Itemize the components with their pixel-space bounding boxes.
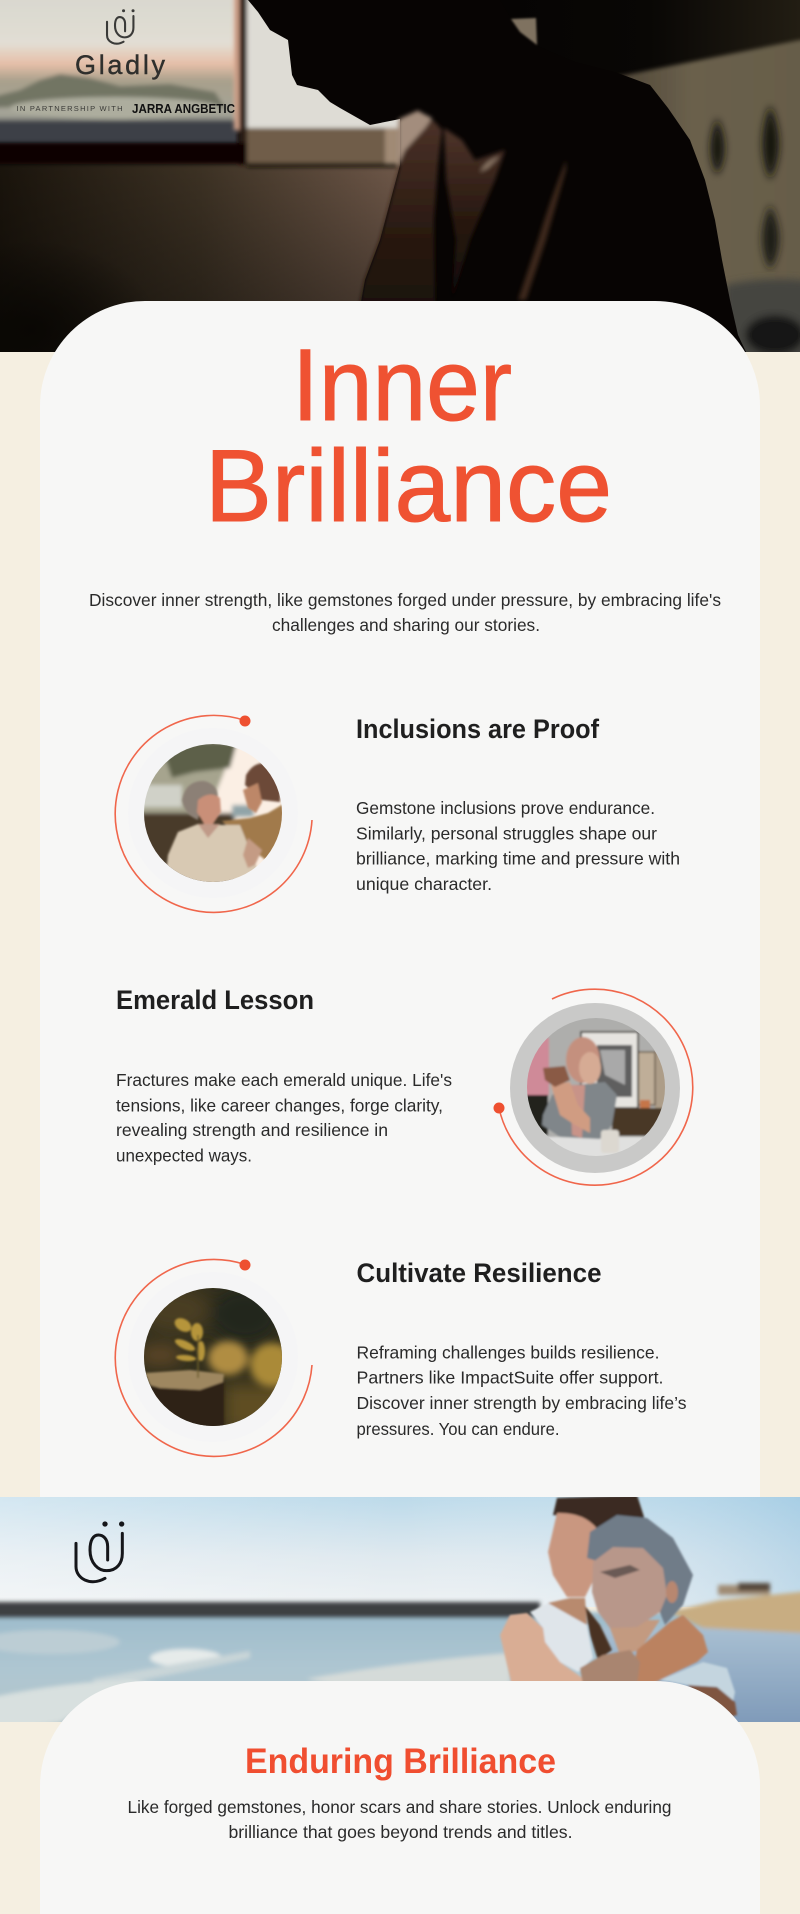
intro text: Discover inner strength, like gemstones forged under pressure, by embracing life's (89, 590, 721, 610)
hero left window (0, 0, 238, 145)
body 2 (116, 1070, 452, 1166)
beach photo: two women embracing (0, 1495, 800, 1738)
photo ring 1 (115, 715, 312, 912)
title (205, 328, 612, 543)
section 2: Emerald Lesson (116, 985, 693, 1185)
hero wall and tufted headboard (620, 0, 800, 352)
heading 1: Inclusions are Proof (356, 714, 600, 744)
closing text: brilliance that goes beyond trends and titles. (228, 1822, 572, 1842)
body 2: Fractures make each emerald unique. Life's (116, 1070, 452, 1090)
body 3: Discover inner strength by embracing life’s (356, 1393, 687, 1413)
intro text: challenges and sharing our stories. (272, 615, 540, 635)
hero neck highlight (511, 18, 537, 45)
body 1 (356, 798, 680, 894)
photo: two women talking (144, 744, 282, 882)
closing text: Like forged gemstones, honor scars and share stories. Unlock enduring (128, 1797, 672, 1817)
hero photo: woman in silhouette by a window (0, 0, 800, 352)
older woman's neck and face (607, 1620, 660, 1655)
title: Inner (292, 328, 512, 442)
partner name: JARRA ANGBETIC (132, 102, 235, 116)
clasped hand (580, 1650, 640, 1685)
body 1: Similarly, personal struggles shape our (356, 824, 657, 844)
younger woman (553, 1495, 645, 1530)
body 3 (356, 1342, 687, 1439)
older woman's shirt (660, 1662, 735, 1702)
women embracing (500, 1495, 737, 1718)
logo icon (107, 9, 135, 44)
hero arm highlights (358, 108, 568, 301)
photo: woman with headscarf (527, 1018, 665, 1156)
body 2: unexpected ways. (116, 1146, 252, 1166)
far shore and sand (610, 1580, 800, 1722)
body 3: pressures. You can endure. (356, 1419, 560, 1439)
title: Brilliance (205, 429, 612, 543)
body 3: Partners like ImpactSuite offer support. (356, 1368, 664, 1388)
sea (0, 1598, 702, 1722)
photo: plant growing from a stump (144, 1288, 282, 1426)
heading 3: Cultivate Resilience (356, 1258, 602, 1288)
section 1: Inclusions are Proof (115, 714, 680, 912)
plant (172, 1315, 205, 1362)
body 2: revealing strength and resilience in (116, 1120, 388, 1140)
body 3: Reframing challenges builds resilience. (356, 1342, 660, 1362)
body 1: Gemstone inclusions prove endurance. (356, 798, 655, 818)
photo ring 2 (494, 989, 693, 1185)
older woman's hair (587, 1515, 693, 1625)
embracing arm (630, 1615, 708, 1685)
section 3: Cultivate Resilience (115, 1258, 687, 1456)
top content panel (40, 301, 760, 1497)
hero right window (0, 0, 416, 167)
stump (150, 1382, 226, 1426)
body 2: tensions, like career changes, forge clarity, (116, 1096, 443, 1116)
heading 2: Emerald Lesson (116, 985, 314, 1015)
hero bed surface (0, 162, 400, 314)
body 1: unique character. (356, 874, 492, 894)
photo ring 3 (115, 1259, 312, 1456)
bottom content panel (40, 1681, 760, 1914)
hero silhouette (248, 0, 746, 352)
partnership label: IN PARTNERSHIP WITH (16, 104, 122, 113)
closing heading: Enduring Brilliance (245, 1742, 556, 1781)
closing text (128, 1797, 672, 1842)
brand logo: Gladly (16, 9, 235, 116)
body 1: brilliance, marking time and pressure with (356, 848, 680, 868)
logo wordmark: Gladly (75, 50, 166, 80)
logo mark on beach photo (76, 1521, 124, 1582)
intro text (89, 590, 721, 635)
